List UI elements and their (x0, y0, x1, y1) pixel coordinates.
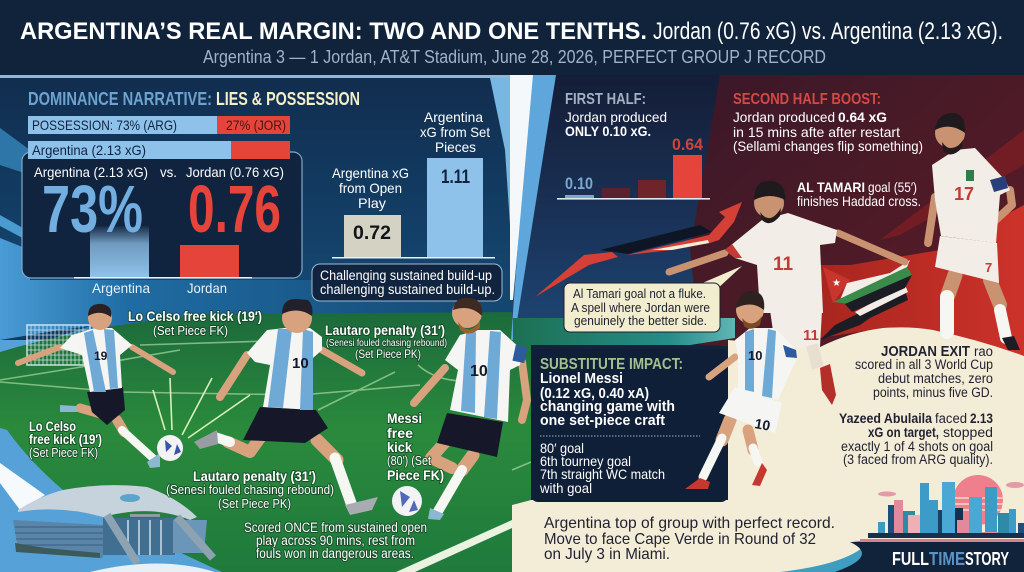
set piece label: Pieces (435, 139, 476, 155)
text: Al Tamari goal (797, 179, 921, 209)
background: left diagonal streaks (0, 75, 512, 356)
label: Lo Celso top: Lo Celso free kick (19′) (128, 309, 262, 324)
label: Lautaro lower: (Set Piece PK) (218, 496, 291, 511)
text: Yazeed Abulaila: xG on target, (868, 425, 939, 440)
background: teal band (513, 318, 735, 345)
panel: substitute impact: one set-piece craft (540, 413, 665, 429)
label: Lautaro top: (Set Piece PK) (355, 347, 421, 361)
open play bar (344, 215, 401, 257)
callout: sustained build-up (312, 264, 502, 301)
set piece label: xG from Set (420, 124, 490, 140)
text: Yazeed Abulaila: stopped (943, 425, 993, 440)
brand: FULLTIMESTORY (835, 542, 1024, 572)
text: first half: ONLY 0.10 xG. (565, 123, 651, 139)
panel heading: dominance narrative: DOMINANCE NARRATIVE: (28, 89, 212, 109)
callout: not a fluke (564, 266, 742, 332)
text: Al Tamari goal: AL TAMARI (797, 179, 865, 195)
text: Yazeed Abulaila: 2.13 (970, 411, 993, 426)
brand: FULLTIMESTORY: TIME (929, 549, 965, 569)
text: Yazeed Abulaila (839, 411, 993, 467)
bar labels: Argentina (92, 280, 150, 296)
label: Lautaro lower: (Senesi fouled chasing rebound) (166, 482, 334, 497)
text: Jordan exit: rao (974, 344, 993, 359)
set piece label (420, 109, 490, 155)
text: scored once: play across 90 mins, rest from (256, 533, 415, 548)
callout: sustained build-up: Challenging sustained build-up (320, 268, 492, 283)
background: central white and blue wedge (510, 75, 556, 340)
label: Lautaro top: (Senesi fouled chasing rebound) (326, 338, 447, 349)
icon: goal net (27, 325, 90, 365)
possession bar (28, 116, 290, 134)
text: Yazeed Abulaila: faced (935, 411, 967, 426)
set piece label: Argentina (424, 109, 483, 125)
label: Lo Celso lower: free kick (19′) (29, 432, 102, 447)
text: second half boost: (Sellami changes flip something) (733, 138, 923, 154)
text: Yazeed Abulaila: Yazeed Abulaila (839, 411, 932, 426)
open play bar: 0.72 (353, 223, 391, 244)
icon: Miami skyline (860, 475, 1024, 542)
figure: Jordan 17: 17 (954, 184, 974, 204)
set piece bar (427, 158, 483, 257)
icon: stadium (13, 485, 213, 563)
text: second half boost: in 15 mins afte after restart (733, 124, 900, 140)
possession bar: POSSESSION: 73% (ARG) (32, 117, 177, 133)
brand: FULLTIMESTORY: FULL (892, 549, 929, 569)
figure: Lo Celso (18, 304, 173, 468)
text: Jordan exit (855, 343, 993, 400)
possession bar: 27% (JOR) (226, 117, 286, 133)
background: left lower blue with white band (0, 340, 225, 572)
bar labels: Jordan (187, 280, 227, 296)
panel heading: dominance narrative: LIES & POSSESSION (216, 89, 360, 109)
figure: Lo Celso: 19 (94, 349, 108, 363)
open play label (332, 165, 409, 211)
panel: xG comparison (22, 152, 302, 278)
graphic: Jordan flag (820, 260, 912, 340)
background: right dark red field (690, 75, 1024, 360)
title: ARGENTINA’S REAL MARGIN: TWO AND ONE TENTHS. (20, 18, 647, 45)
panel heading: dominance narrative (28, 89, 360, 109)
panel: substitute impact: 80′ goal (540, 440, 584, 456)
label: Lautaro lower (166, 469, 334, 511)
label: Lautaro top (325, 323, 447, 361)
comparison heading: Jordan (0.76 xG) (186, 164, 284, 180)
text: scored once: fouls won in dangerous areas. (256, 546, 414, 561)
figure: Messi left: 10 (470, 363, 488, 380)
text: Jordan exit: points, minus five GD. (873, 385, 993, 400)
panel: substitute impact: 7th straight WC match (540, 466, 665, 482)
text: first half: Jordan produced (565, 109, 667, 125)
icon: ball two (392, 486, 422, 516)
panel: substitute impact: with goal (539, 480, 592, 496)
text: Yazeed Abulaila: (3 faced from ARG quality). (843, 452, 993, 467)
figure: Jordan 17 (928, 113, 1020, 350)
chart: open play vs set pieces (332, 109, 495, 258)
comparison heading: Argentina (2.13 xG) (34, 164, 148, 180)
label: Messi free kick: free (387, 425, 413, 441)
figure: Jordan 17: 7 (985, 260, 992, 275)
text: scored once (244, 520, 427, 561)
xG bar (28, 141, 290, 159)
bar: Jordan (180, 245, 239, 277)
chart: first vs second half xG (557, 135, 710, 200)
bar labels (74, 277, 252, 296)
panel: substitute impact: 6th tourney goal (540, 453, 631, 469)
big number: 0.76: 0.76 (188, 172, 281, 247)
chart: first vs second half xG: 0.64 (672, 135, 704, 154)
background: cream field (512, 327, 1024, 572)
text: next match: on July 3 in Miami. (544, 546, 670, 563)
text: second half boost: SECOND HALF BOOST: (733, 91, 881, 108)
text: next match: Move to face Cape Verde in Round of 32 (544, 531, 816, 548)
text: first half: FIRST HALF: (565, 91, 646, 108)
callout: not a fluke: genuinely the better side. (574, 313, 707, 328)
header band (0, 0, 1024, 75)
figure: Messi left (414, 298, 528, 520)
text: Jordan exit: JORDAN EXIT (881, 343, 970, 360)
label: Lo Celso top: (Set Piece FK) (153, 323, 228, 338)
xG bar: Argentina (2.13 xG) (32, 142, 146, 158)
label: Lo Celso top (128, 309, 262, 338)
graphic: Jordan flag: ★ (832, 278, 841, 289)
title (20, 18, 1003, 45)
icon: ball one (157, 435, 183, 461)
figure: Messi centre (685, 291, 797, 489)
figure: Lautaro (194, 299, 378, 515)
label: Lautaro lower: Lautaro penalty (31′) (193, 469, 316, 484)
label: Messi free kick (387, 410, 444, 483)
subtitle: Argentina 3 — 1 Jordan, AT&T Stadium, June 28, 2026, PERFECT GROUP J RECORD (203, 47, 826, 67)
open play label: Play (358, 195, 386, 211)
text: Jordan exit: debut matches, zero (878, 371, 993, 386)
panel: substitute impact: Lionel Messi (540, 371, 623, 387)
text: second half boost: Jordan produced (733, 109, 835, 125)
comparison heading: vs. (160, 164, 177, 180)
callout: not a fluke: Al Tamari goal not a fluke. (573, 286, 706, 301)
background: right navy field (512, 75, 727, 320)
text: scored once: Scored ONCE from sustained open (244, 520, 427, 535)
panel: substitute impact: SUBSTITUTE IMPACT: (540, 356, 683, 373)
comparison heading (34, 164, 284, 180)
figure: Jordan 11: 11 (803, 327, 819, 344)
label: Messi free kick: (80′) (Set (387, 453, 431, 468)
label: Messi free kick: Messi (387, 410, 422, 426)
label: Messi free kick: Piece FK) (387, 467, 444, 483)
background: left blue field (0, 75, 512, 345)
background: red diagonal swoosh (820, 130, 1024, 356)
text: Al Tamari goal: goal (55′) (868, 179, 917, 195)
label: Lo Celso lower: Lo Celso (29, 419, 76, 434)
callout: sustained build-up: challenging sustained build-up. (320, 282, 495, 297)
figure: Lautaro: 10 (292, 355, 309, 372)
text: second half boost: 0.64 xG (838, 109, 887, 125)
panel: substitute impact: changing game with (540, 399, 675, 415)
label: Lautaro top: Lautaro penalty (31′) (325, 323, 445, 338)
text: Jordan exit: scored in all 3 World Cup (855, 357, 993, 372)
label: Lo Celso lower (29, 419, 102, 460)
background: pitch (0, 312, 531, 572)
panel: substitute impact: (0.12 xG, 0.40 xA) (540, 386, 649, 402)
text: next match: Argentina top of group with perfect record. (544, 515, 835, 532)
bar: Argentina (90, 226, 149, 277)
text: second half boost (733, 91, 923, 154)
open play label: Argentina xG (332, 165, 409, 181)
open play label: from Open (339, 180, 402, 196)
text: Yazeed Abulaila: exactly 1 of 4 shots on goal (841, 439, 993, 454)
panel: substitute impact (531, 349, 728, 502)
label: Lo Celso lower: (Set Piece FK) (29, 445, 98, 460)
label: Messi free kick: kick (387, 439, 412, 455)
text: Al Tamari goal: finishes Haddad cross. (797, 193, 921, 209)
figure: Jordan 11 (669, 181, 905, 405)
arrow: rising xG (535, 202, 742, 297)
figure: Messi centre: 10 (748, 348, 762, 363)
background: miami water curve (780, 541, 880, 572)
set piece bar: 1.11 (441, 167, 470, 188)
big number: 73%: 73% (42, 172, 143, 247)
callout: not a fluke: A spell where Jordan were (571, 300, 710, 315)
figure: Jordan 11: 11 (773, 254, 794, 275)
text: first half (565, 91, 667, 139)
figure: Messi centre: 10 (753, 415, 772, 434)
text: next match (544, 515, 835, 563)
chart: first vs second half xG: 0.10 (565, 174, 593, 193)
